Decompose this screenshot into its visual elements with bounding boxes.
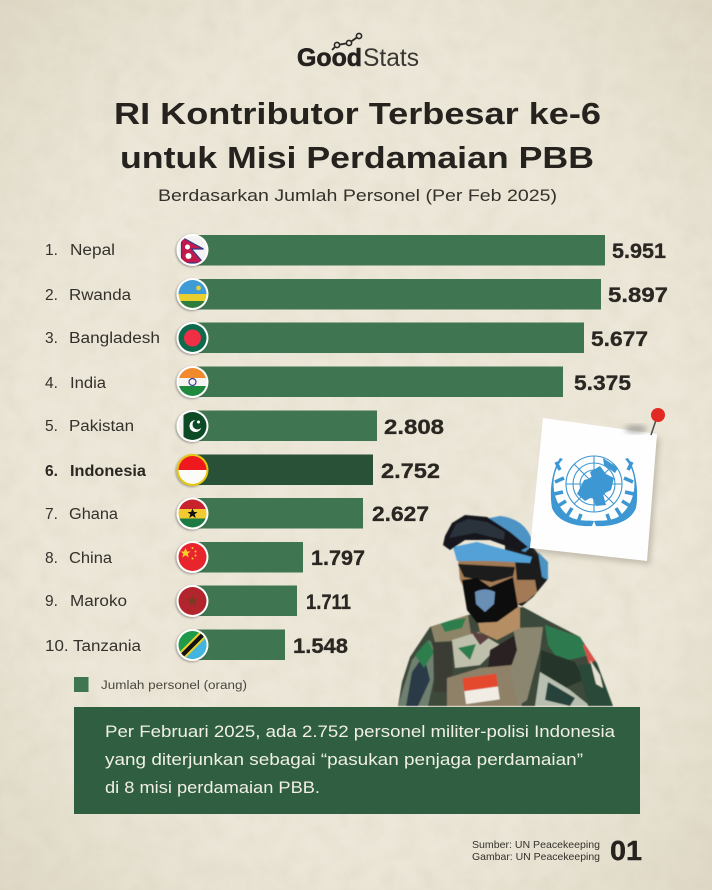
UN emblem [551, 456, 637, 526]
row 2: Rwanda: Rwanda [69, 287, 131, 304]
row 8: China [45, 541, 365, 573]
sunglasses [458, 564, 515, 582]
row 5: Pakistan [45, 410, 444, 442]
row 9: Maroko: 1.711 [306, 591, 351, 614]
blue helmet dome [480, 516, 533, 552]
pin [651, 408, 665, 435]
face mask [462, 577, 518, 623]
row 9: Maroko [45, 585, 351, 617]
callout: summary text: yang diterjunkan sebagai “pasukan penjaga perdamaian” [105, 750, 583, 769]
logo: GoodStats [297, 33, 419, 72]
row 5: Pakistan: 2.808 [384, 416, 444, 439]
row 6: Indonesia (highlighted): 6. [45, 463, 58, 480]
tape smudge [625, 426, 647, 432]
sources [472, 839, 600, 863]
note shadow [534, 424, 660, 565]
neck [477, 606, 520, 640]
sticky note with UN logo [530, 408, 665, 565]
title [114, 96, 601, 175]
row 1: Nepal: Nepal [70, 242, 115, 259]
bar chart: personnel per country [45, 234, 668, 661]
photo: UN peacekeeper soldier [395, 515, 617, 708]
legend [74, 677, 247, 692]
page number: 01 [610, 835, 642, 866]
row 2: Rwanda [45, 278, 668, 310]
row 5: Pakistan: Pakistan [69, 418, 134, 435]
row 10: Tanzania: 1.548 [293, 635, 348, 658]
logo: GoodStats: Stats [363, 44, 419, 72]
row 7: Ghana: 2.627 [372, 503, 429, 526]
face [458, 558, 537, 605]
logo: GoodStats: Good [297, 44, 362, 72]
row 7: Ghana: 7. [45, 506, 58, 523]
row 7: Ghana: Ghana [69, 506, 118, 523]
row 7: Ghana [45, 498, 429, 530]
callout: summary text: di 8 misi perdamaian PBB. [105, 778, 320, 797]
row 8: China: 8. [45, 550, 58, 567]
row 6: Indonesia (highlighted): 2.752 [381, 460, 440, 483]
row 4: India: India [70, 375, 106, 392]
sources: Gambar: UN Peacekeeping [472, 851, 600, 863]
row 6: Indonesia (highlighted) [45, 454, 440, 486]
callout: summary text [74, 707, 640, 814]
row 1: Nepal: 5.951 [612, 240, 666, 263]
row 3: Bangladesh: Bangladesh [69, 330, 160, 347]
soldier uniform [395, 605, 617, 708]
mask badge [475, 590, 495, 612]
row 4: India: 4. [45, 375, 58, 392]
title: untuk Misi Perdamaian PBB [120, 140, 594, 175]
row 5: Pakistan: 5. [45, 418, 58, 435]
tactical vest [447, 665, 522, 706]
row 2: Rwanda: 5.897 [608, 284, 668, 307]
white note [530, 418, 657, 561]
legend: Jumlah personel (orang) [101, 680, 247, 692]
row 10: Tanzania [45, 629, 348, 661]
row 9: Maroko: 9. [45, 593, 58, 610]
uniform flag patch [462, 674, 500, 704]
row 8: China: 1.797 [311, 547, 365, 570]
row 10: Tanzania: 10. Tanzania [45, 638, 141, 655]
hair and helmet back [505, 543, 548, 606]
row 9: Maroko: Maroko [70, 593, 127, 610]
row 8: China: China [69, 550, 112, 567]
title: RI Kontributor Terbesar ke-6 [114, 96, 601, 131]
row 3: Bangladesh [45, 322, 648, 354]
row 1: Nepal: 1. [45, 242, 58, 259]
row 4: India [45, 366, 631, 398]
row 1: Nepal [45, 234, 666, 266]
helmet brim [453, 542, 532, 563]
row 3: Bangladesh: 5.677 [591, 328, 648, 351]
row 2: Rwanda: 2. [45, 287, 58, 304]
subtitle: Berdasarkan Jumlah Personel (Per Feb 2025) [158, 186, 557, 205]
row 3: Bangladesh: 3. [45, 330, 58, 347]
row 6: Indonesia (highlighted): Indonesia [70, 463, 146, 480]
callout: summary text: Per Februari 2025, ada 2.752 personel militer-polisi Indonesia [105, 722, 616, 741]
goggles [443, 515, 528, 551]
sources: Sumber: UN Peacekeeping [472, 839, 600, 851]
row 4: India: 5.375 [574, 372, 631, 395]
